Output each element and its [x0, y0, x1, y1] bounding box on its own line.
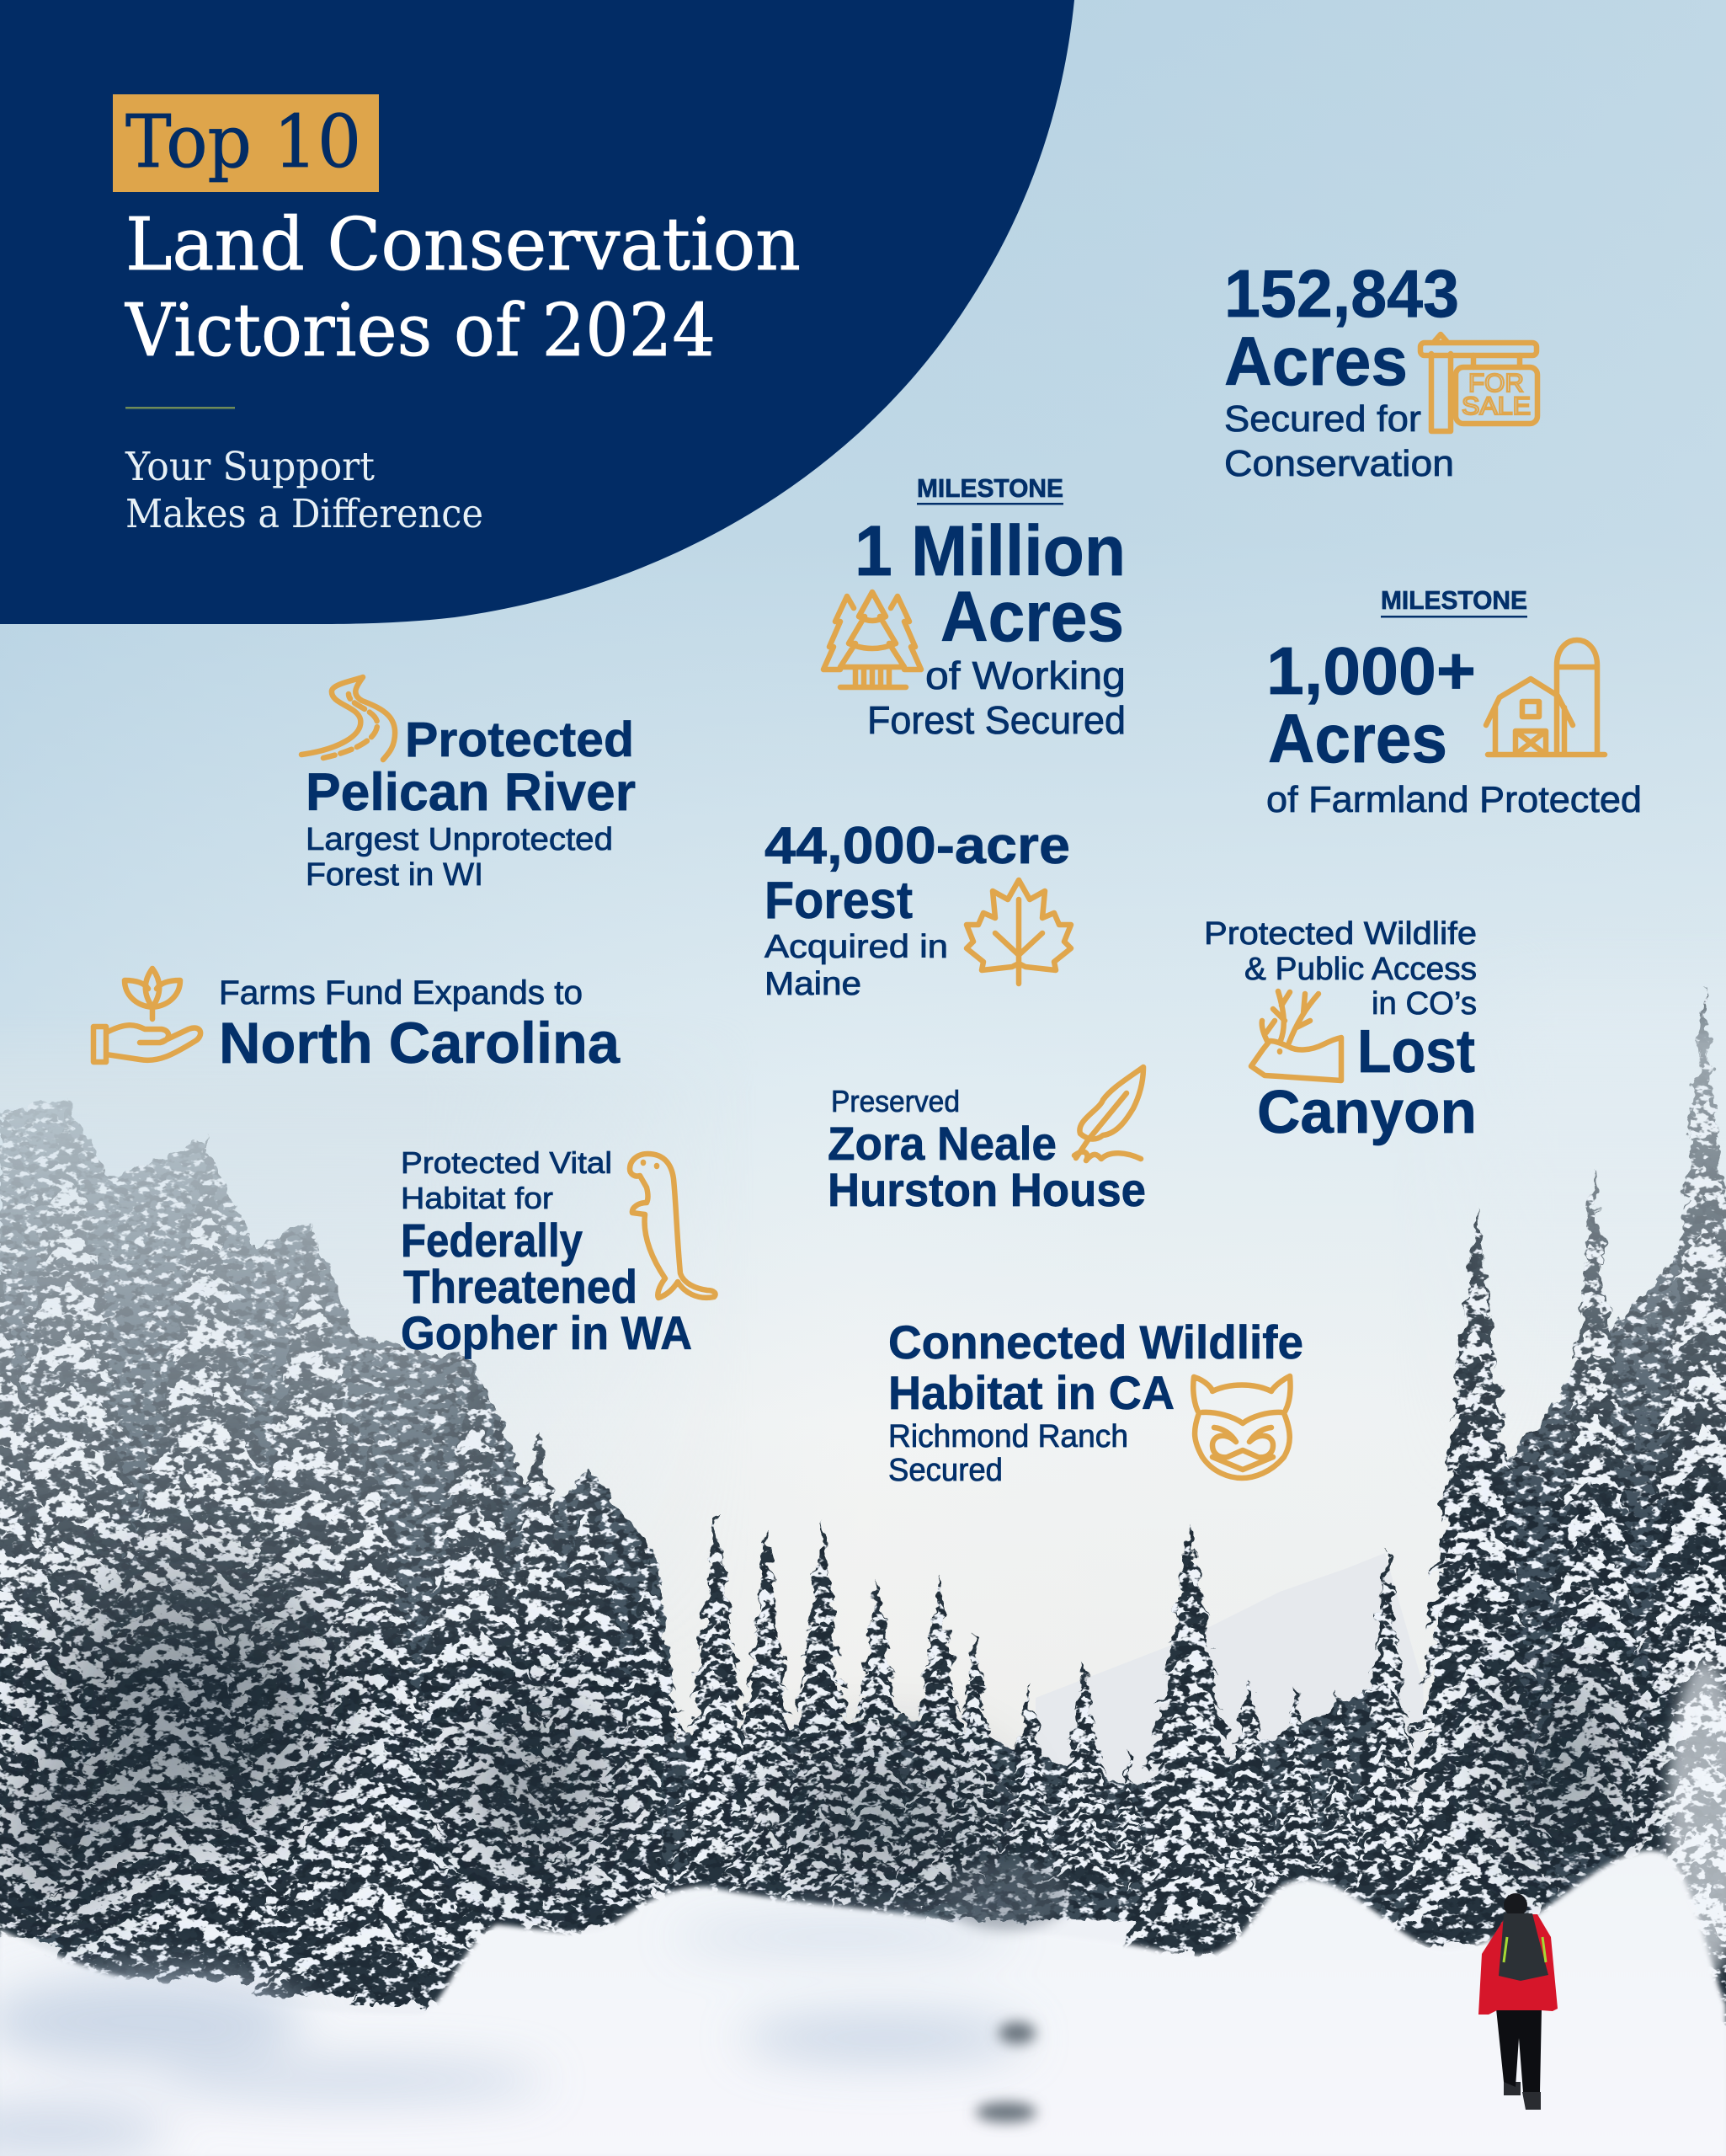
- subtitle: [125, 407, 483, 537]
- text: Hurston House: [828, 1163, 1146, 1216]
- text: Acres: [940, 577, 1124, 656]
- text: [764, 817, 1070, 1002]
- text: Habitat in CA: [888, 1366, 1175, 1419]
- text: Forest Secured: [867, 698, 1126, 742]
- distant snowy mountain: [1036, 1553, 1431, 1870]
- creek: [976, 2022, 1036, 2122]
- text: [855, 511, 1126, 742]
- text: Acres: [1224, 323, 1408, 400]
- text: [888, 1315, 1303, 1488]
- text: Protected: [405, 712, 634, 767]
- icon: for sale sign: [1420, 334, 1537, 431]
- title: Victories of 2024: [125, 289, 716, 373]
- badge: Top 10: Top 10: [125, 100, 361, 184]
- backpack: [1499, 1913, 1548, 1981]
- icon: elk head: [1251, 991, 1341, 1081]
- text: Acres: [1268, 701, 1447, 777]
- text: Forest in WI: [306, 857, 483, 893]
- item: North Carolina: [93, 969, 621, 1075]
- text: [1266, 633, 1642, 820]
- icon: gopher: [630, 1154, 716, 1298]
- item: Lost Canyon: [1204, 916, 1477, 1146]
- text: [306, 712, 636, 893]
- text: Federally: [401, 1214, 583, 1267]
- jacket: [1478, 1914, 1558, 2015]
- header panel: navy curved shape: [0, 0, 1074, 624]
- trousers: [1496, 2009, 1542, 2092]
- title: Land Conservation: [125, 203, 801, 287]
- icon: maple leaf: [967, 880, 1071, 984]
- text: Richmond Ranch: [888, 1419, 1128, 1454]
- text: Farms Fund Expands to: [219, 974, 583, 1011]
- navy curve: [0, 0, 1074, 624]
- text: Preserved: [831, 1084, 960, 1118]
- text: [219, 974, 621, 1075]
- left tree mass: [0, 1099, 674, 1988]
- text: [401, 1145, 692, 1359]
- text: Protected Wildlife: [1204, 916, 1477, 952]
- text: 152,843: [1224, 256, 1459, 331]
- text: Acquired in: [764, 929, 948, 965]
- text: Maine: [764, 966, 861, 1002]
- text: [828, 1084, 1146, 1216]
- text: 1,000+: [1266, 633, 1476, 708]
- subtitle: Makes a Difference: [125, 491, 483, 537]
- text: [1204, 916, 1477, 1146]
- text: 1 Million: [855, 511, 1126, 590]
- subtitle: Your Support: [125, 444, 375, 490]
- icon: hand with sprout: [93, 969, 200, 1062]
- text: Secured: [888, 1453, 1003, 1488]
- foreground snow: [0, 1850, 1726, 2156]
- icon: pine trees: [823, 592, 921, 687]
- icon: cougar head: [1193, 1376, 1291, 1478]
- item: Federally Threatened Gopher: [401, 1145, 716, 1359]
- icon: river: [301, 677, 395, 760]
- item: 1,000+ acres milestone: [1266, 585, 1642, 820]
- text: Lost: [1357, 1018, 1475, 1086]
- text: Largest Unprotected: [306, 822, 613, 857]
- item: 1 million acres milestone: [823, 473, 1126, 742]
- boots: [1504, 2082, 1541, 2110]
- item: Pelican River: [301, 677, 636, 893]
- head: [1504, 1893, 1527, 1917]
- text: North Carolina: [219, 1011, 621, 1075]
- title: [125, 203, 801, 373]
- text: Pelican River: [306, 763, 636, 822]
- icon: barn and silo: [1486, 640, 1605, 755]
- middle tree line: [665, 1684, 1431, 1920]
- text: Gopher in WA: [401, 1306, 692, 1359]
- text: of Working: [925, 654, 1126, 697]
- text: 44,000-acre: [764, 817, 1070, 875]
- item: Connected Wildlife Habitat in CA: [888, 1315, 1303, 1488]
- icon: for sale sign: SALE: [1462, 392, 1531, 420]
- text: Conservation: [1224, 443, 1454, 484]
- text: Zora Neale: [828, 1117, 1057, 1170]
- text: of Farmland Protected: [1266, 779, 1642, 820]
- icon: for sale sign: FOR: [1468, 368, 1524, 398]
- hiker: [1478, 1893, 1558, 2110]
- milestone label: MILESTONE: [1381, 585, 1527, 615]
- snow ground behind trees: [0, 1794, 1726, 2156]
- text: Habitat for: [401, 1181, 553, 1215]
- snow shadows: [0, 1925, 1027, 2156]
- text: Secured for: [1224, 398, 1421, 440]
- text: Connected Wildlife: [888, 1315, 1303, 1369]
- text: in CO’s: [1372, 986, 1477, 1022]
- forest depth shadows: [0, 1558, 1625, 1912]
- text: Protected Vital: [401, 1145, 612, 1180]
- fog over right treetops: [1452, 986, 1726, 1486]
- snowy far-right tree highlight: [1667, 1659, 1726, 1979]
- forest: trees: [0, 990, 1726, 2022]
- text: [1224, 256, 1459, 484]
- fog over left treetops: [0, 1091, 658, 1652]
- bare shrubs: [943, 1860, 1069, 1930]
- icon: feather quill: [1074, 1067, 1143, 1161]
- text: Canyon: [1257, 1079, 1477, 1146]
- right tall trees: [1431, 1196, 1726, 1988]
- item: Zora Neale Hurston House: [828, 1067, 1146, 1216]
- text: Forest: [764, 872, 913, 930]
- milestone label: MILESTONE: [917, 473, 1063, 503]
- text: & Public Access: [1244, 952, 1477, 987]
- item: 44,000-acre forest: [764, 817, 1071, 1002]
- text: Threatened: [403, 1260, 637, 1313]
- item: 152,843 acres: [1224, 256, 1537, 484]
